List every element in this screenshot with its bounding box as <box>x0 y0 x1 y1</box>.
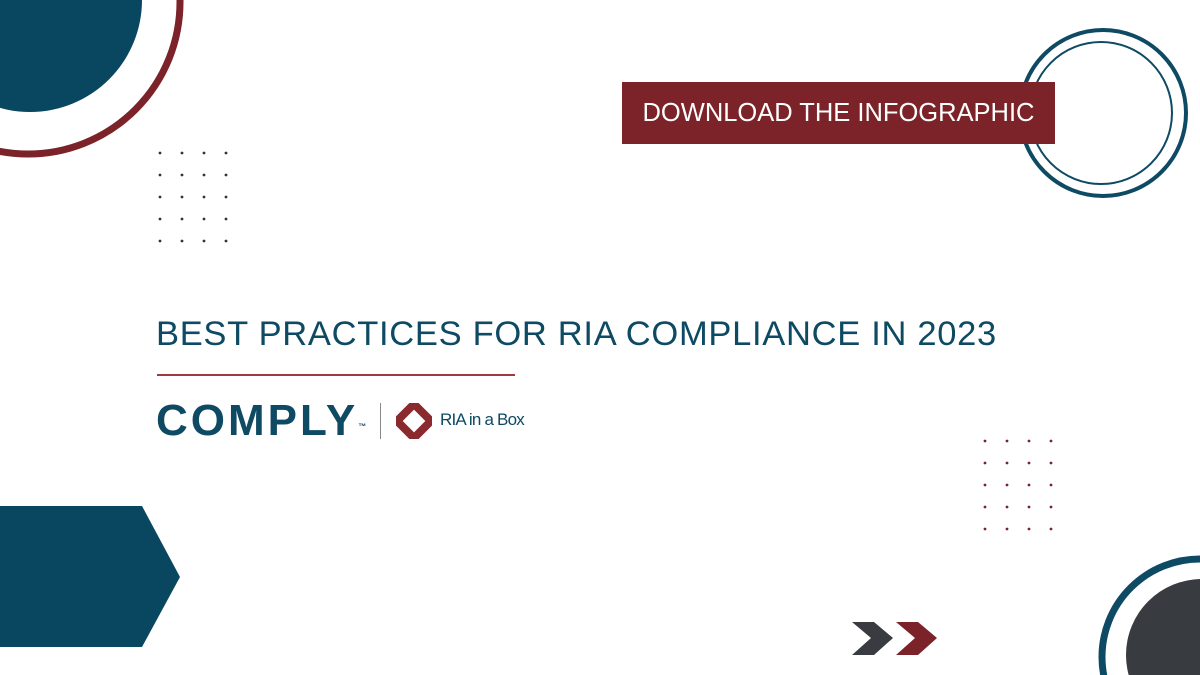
icon: diamond <box>396 403 432 439</box>
dots: bottom-right grid <box>984 440 1052 530</box>
shape: bottom-right ring and circle <box>1102 559 1200 675</box>
logo: RIA in a Box: RIA in a Box <box>440 410 524 429</box>
dots: top-left grid <box>159 152 227 242</box>
shape: top-right double ring <box>1020 30 1186 196</box>
logo: COMPLY: COMPLY™ <box>156 396 366 445</box>
divider red line <box>157 374 515 376</box>
shape: top-left red ring <box>0 0 180 154</box>
title: BEST PRACTICES FOR RIA COMPLIANCE IN 2023 <box>156 315 997 353</box>
icon: chevrons <box>852 622 937 655</box>
divider vertical <box>380 403 381 439</box>
shape: top-left filled circle <box>0 0 142 112</box>
button: download: DOWNLOAD THE INFOGRAPHIC <box>642 99 1034 127</box>
shape: bottom-left pentagon arrow <box>0 506 180 647</box>
button: download <box>622 82 1055 144</box>
logo: RIA in a Box <box>396 403 524 439</box>
